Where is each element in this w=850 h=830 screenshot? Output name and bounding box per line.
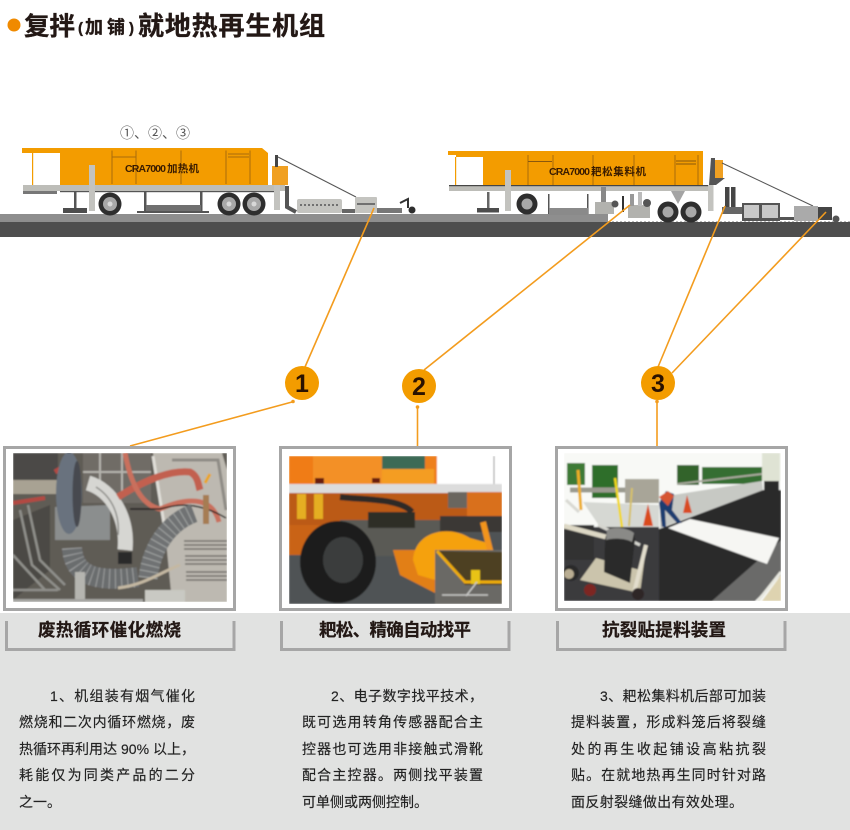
label bracket 1 — [6, 620, 234, 650]
title: ( — [78, 20, 83, 37]
machine label: CRA7000 loosening collector: 耙松集料机 — [591, 165, 646, 178]
title: 复拌 — [24, 13, 75, 41]
connector lines — [130, 205, 826, 446]
label bracket 3 — [558, 620, 785, 650]
machine: CRA7000 heater — [22, 148, 416, 216]
road surface — [0, 214, 850, 237]
label bracket 1: 废热循环催化燃烧 — [38, 620, 182, 640]
text block 1: 热循环再利用达 90% 以上， — [19, 741, 195, 757]
text block 1: 耗能仅为同类产品的二分 — [19, 767, 195, 783]
title: ) — [129, 20, 134, 37]
text block 3: 贴。在就地热再生同时针对路 — [571, 767, 766, 783]
text block 1: 之一。 — [19, 794, 61, 810]
machine label: CRA7000 loosening collector: CRA7000 — [549, 166, 590, 178]
text block 3 — [571, 688, 766, 810]
number badge 3: 3 — [651, 370, 665, 398]
number badge 1: 1 — [295, 370, 309, 398]
text block 2: 可单侧或两侧控制。 — [302, 794, 428, 810]
text block 2: 2、电子数字找平技术， — [331, 688, 483, 704]
circled numbers: ①、②、③ — [120, 125, 190, 141]
number badge 2: 2 — [412, 373, 426, 401]
text block 2 — [302, 688, 483, 810]
machine label: CRA7000 loosening collector — [549, 165, 646, 178]
text block 3: 3、耙松集料机后部可加装 — [600, 688, 766, 704]
machine: CRA7000 loosening collector — [448, 151, 840, 222]
number badge 3 — [641, 366, 675, 400]
text block 1: 1、机组装有烟气催化 — [50, 688, 195, 704]
text block 3: 面反射裂缝做出有效处理。 — [571, 794, 743, 810]
number badge 2 — [402, 369, 436, 403]
text block 1 — [19, 688, 195, 810]
label bracket 3: 抗裂贴提料装置 — [602, 620, 726, 640]
text block 2: 配合主控器。两侧找平装置 — [302, 767, 483, 783]
label bracket 2 — [282, 620, 509, 650]
title: 就地热再生机组 — [138, 11, 325, 41]
machine label: CRA7000 heater: 加热机 — [167, 162, 200, 175]
machine label: CRA7000 heater — [125, 162, 200, 175]
text block 2: 既可选用转角传感器配合主 — [302, 714, 483, 730]
panel: loosening and levelling photo — [280, 448, 510, 610]
number badge 1 — [285, 366, 319, 400]
text block 2: 控器也可选用非接触式滑靴 — [302, 741, 483, 757]
title: 加铺 — [85, 18, 125, 38]
grey lower background — [0, 613, 850, 830]
panel: waste heat photo — [4, 448, 234, 610]
label bracket 2: 耙松、精确自动找平 — [319, 620, 471, 640]
text block 3: 处的再生收起铺设高粘抗裂 — [571, 741, 766, 757]
panel: anti-crack photo — [556, 448, 786, 610]
text block 1: 燃烧和二次内循环燃烧，废 — [19, 714, 195, 730]
machine label: CRA7000 heater: CRA7000 — [125, 163, 166, 175]
title — [8, 11, 325, 41]
text block 3: 提料装置，形成料笼后将裂缝 — [571, 714, 766, 730]
